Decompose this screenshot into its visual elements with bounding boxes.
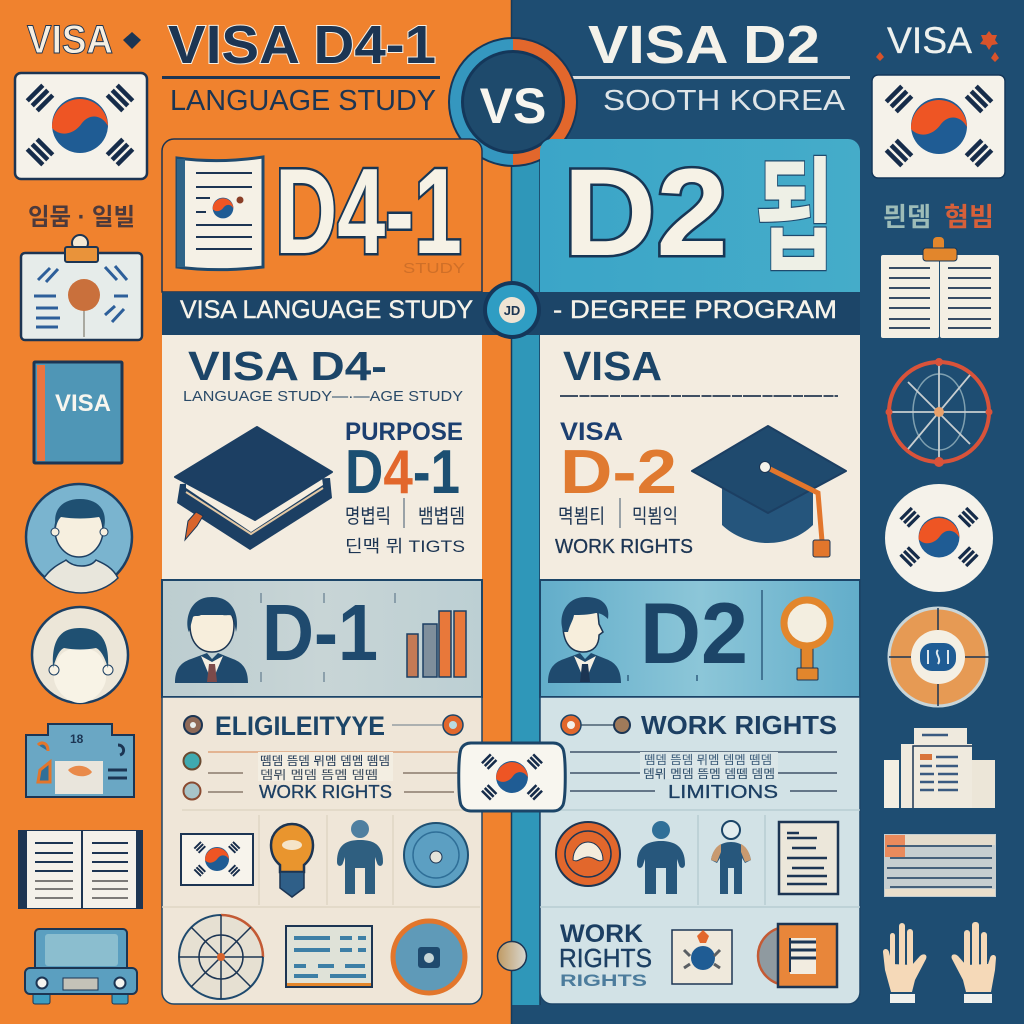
panel: right purpose bbox=[540, 335, 860, 579]
work rights list: 뎀뮈 멤뎀 뜸멤 뎀뗌 뎀멤 bbox=[643, 767, 775, 781]
icon: open book bbox=[881, 237, 999, 338]
icon: flag right top bbox=[872, 75, 1005, 178]
VS badge: VS bbox=[480, 78, 546, 134]
work rights list: 뗌뎀 뜸뎀 뮈멤 뎀멤 뗌뎀 bbox=[644, 753, 772, 767]
icon: flag circle bbox=[885, 484, 993, 592]
icon: flag left top bbox=[15, 73, 147, 179]
panel: left purpose: PURPOSE bbox=[345, 418, 463, 446]
right column bbox=[872, 20, 1005, 1003]
icon: person avatar 2 bbox=[32, 607, 128, 703]
eligibility list: ELIGILEITYYE bbox=[215, 711, 385, 741]
left heading: VISA D4-1 bbox=[168, 15, 436, 75]
panel: left person row bbox=[162, 580, 482, 697]
icon: visa passport bbox=[34, 362, 122, 463]
panel: left eligibility and icons bbox=[162, 697, 482, 1004]
panel: D4-1 hero: STUDY bbox=[403, 260, 465, 277]
icon: document book bbox=[177, 157, 263, 270]
panel: left purpose: 딘맥 뮈 TIGTS bbox=[345, 537, 465, 556]
icon: graduation cap bbox=[692, 426, 846, 557]
panel: left purpose: 명볍릭 bbox=[345, 505, 391, 528]
banner: right: - DEGREE PROGRAM bbox=[553, 296, 837, 324]
icon: round badge bbox=[404, 823, 468, 887]
icon: striped table bbox=[884, 834, 996, 897]
banner: left: VISA LANGUAGE STUDY bbox=[180, 296, 473, 324]
panel: D2 hero: 됩 bbox=[755, 149, 835, 287]
panel: D2 hero bbox=[540, 139, 860, 292]
background: orange half bbox=[0, 0, 512, 1024]
panel: left purpose: D4-1 bbox=[345, 438, 460, 507]
banner: left bbox=[162, 292, 512, 335]
icon: maple leaves bbox=[876, 31, 999, 62]
label: VISA: VISA bbox=[887, 20, 972, 61]
panel: left person row: D-1 bbox=[262, 588, 378, 677]
background: navy half bbox=[512, 0, 1024, 1024]
panel: right work rights and icons bbox=[540, 697, 860, 1004]
chart: bars bbox=[407, 611, 466, 677]
icon: clipboard map bbox=[21, 235, 142, 340]
panel: right person row bbox=[540, 580, 860, 697]
panel: right purpose: D-2 bbox=[560, 438, 677, 507]
panel: left purpose bbox=[162, 335, 482, 579]
icon: person avatar 1 bbox=[26, 484, 132, 593]
text: work rights: RIGHTS bbox=[560, 971, 647, 990]
left heading: LANGUAGE STUDY bbox=[170, 85, 436, 117]
panel: right purpose: WORK RIGHTS bbox=[555, 536, 693, 558]
icon: hands bbox=[883, 922, 996, 1003]
panel: right purpose: VISA bbox=[563, 343, 662, 389]
icon: vehicle bbox=[25, 929, 137, 1004]
icon: dashboard card: 18 bbox=[70, 732, 84, 746]
icon: orange ring bbox=[393, 921, 465, 993]
icon: person outline bbox=[711, 821, 751, 894]
icon: photo card bbox=[672, 930, 732, 984]
icon: businessman bbox=[175, 597, 248, 683]
right heading: VISA D2 bbox=[588, 15, 820, 75]
eligibility list bbox=[162, 711, 480, 907]
left column bbox=[15, 18, 147, 1004]
VS badge bbox=[448, 37, 578, 167]
center seal bbox=[483, 281, 541, 339]
work rights list: LIMITIONS bbox=[668, 782, 778, 802]
icon: small diamond bbox=[123, 32, 141, 49]
banner: right bbox=[512, 292, 860, 335]
panel: D4-1 hero bbox=[162, 139, 482, 292]
eligibility list: 뗌뎀 뜸뎀 뮈멤 뎀멤 뗌뎀 bbox=[260, 754, 390, 768]
panel: left purpose: VISA D4- bbox=[188, 343, 387, 389]
small label bbox=[883, 202, 994, 232]
icon: compass wheel bbox=[179, 915, 263, 999]
center blue strip bbox=[512, 138, 540, 1005]
panel: left purpose: LANGUAGE STUDY—·—AGE STUDY bbox=[183, 388, 463, 405]
icon: target wheel bbox=[886, 358, 992, 467]
icon: magnifier bbox=[784, 600, 830, 680]
icon: dashboard card bbox=[26, 724, 134, 797]
work rights list bbox=[540, 710, 860, 907]
panel: right purpose: VISA bbox=[560, 418, 623, 446]
icon: person bbox=[337, 820, 383, 894]
panel: left purpose: 뱀볍뎀 bbox=[418, 505, 465, 528]
right heading bbox=[566, 15, 850, 117]
icon: flag bbox=[181, 834, 253, 885]
work rights list: WORK RIGHTS bbox=[641, 710, 837, 740]
icon: orange medallion bbox=[889, 608, 989, 706]
icon: person bbox=[637, 821, 685, 894]
icon: document bbox=[779, 822, 838, 894]
center seal: JD bbox=[504, 303, 520, 318]
icon: visa passport: VISA bbox=[55, 390, 111, 417]
panel: D4-1 hero: D4-1 bbox=[275, 143, 462, 279]
icon: documents bbox=[884, 728, 995, 808]
icon: bulb bbox=[271, 824, 313, 897]
right heading: SOOTH KOREA bbox=[603, 85, 846, 117]
left small label: 임뭄 · 일빌 bbox=[28, 204, 135, 231]
small label: 믠뎀 bbox=[883, 202, 931, 232]
icon: book cap bbox=[175, 427, 332, 550]
panel: D2 hero: D2 bbox=[563, 144, 728, 282]
text: work rights bbox=[559, 920, 652, 990]
icon: data card bbox=[286, 926, 372, 987]
left heading bbox=[162, 15, 440, 117]
panel: right purpose: 믹뵘익 bbox=[632, 505, 678, 528]
icon: notebook badge bbox=[758, 924, 837, 987]
panel: right purpose: 멱뵘티 bbox=[558, 505, 605, 528]
eligibility list: 뎀뮈 멤뎀 뜸멤 뎀뗌 bbox=[260, 768, 378, 782]
eligibility list: WORK RIGHTS bbox=[259, 782, 392, 802]
text: work rights: RIGHTS bbox=[559, 943, 652, 973]
label: VISA: VISA bbox=[27, 18, 113, 62]
text: work rights: WORK bbox=[560, 920, 643, 948]
icon: open book bbox=[18, 830, 143, 909]
small label: 혐빔 bbox=[944, 202, 994, 232]
center flag badge bbox=[459, 743, 565, 811]
center small medallion bbox=[498, 942, 526, 970]
icon: orange circle bbox=[556, 822, 620, 886]
icon: businessman bbox=[548, 597, 621, 683]
panel: right person row: D2 bbox=[640, 586, 748, 682]
